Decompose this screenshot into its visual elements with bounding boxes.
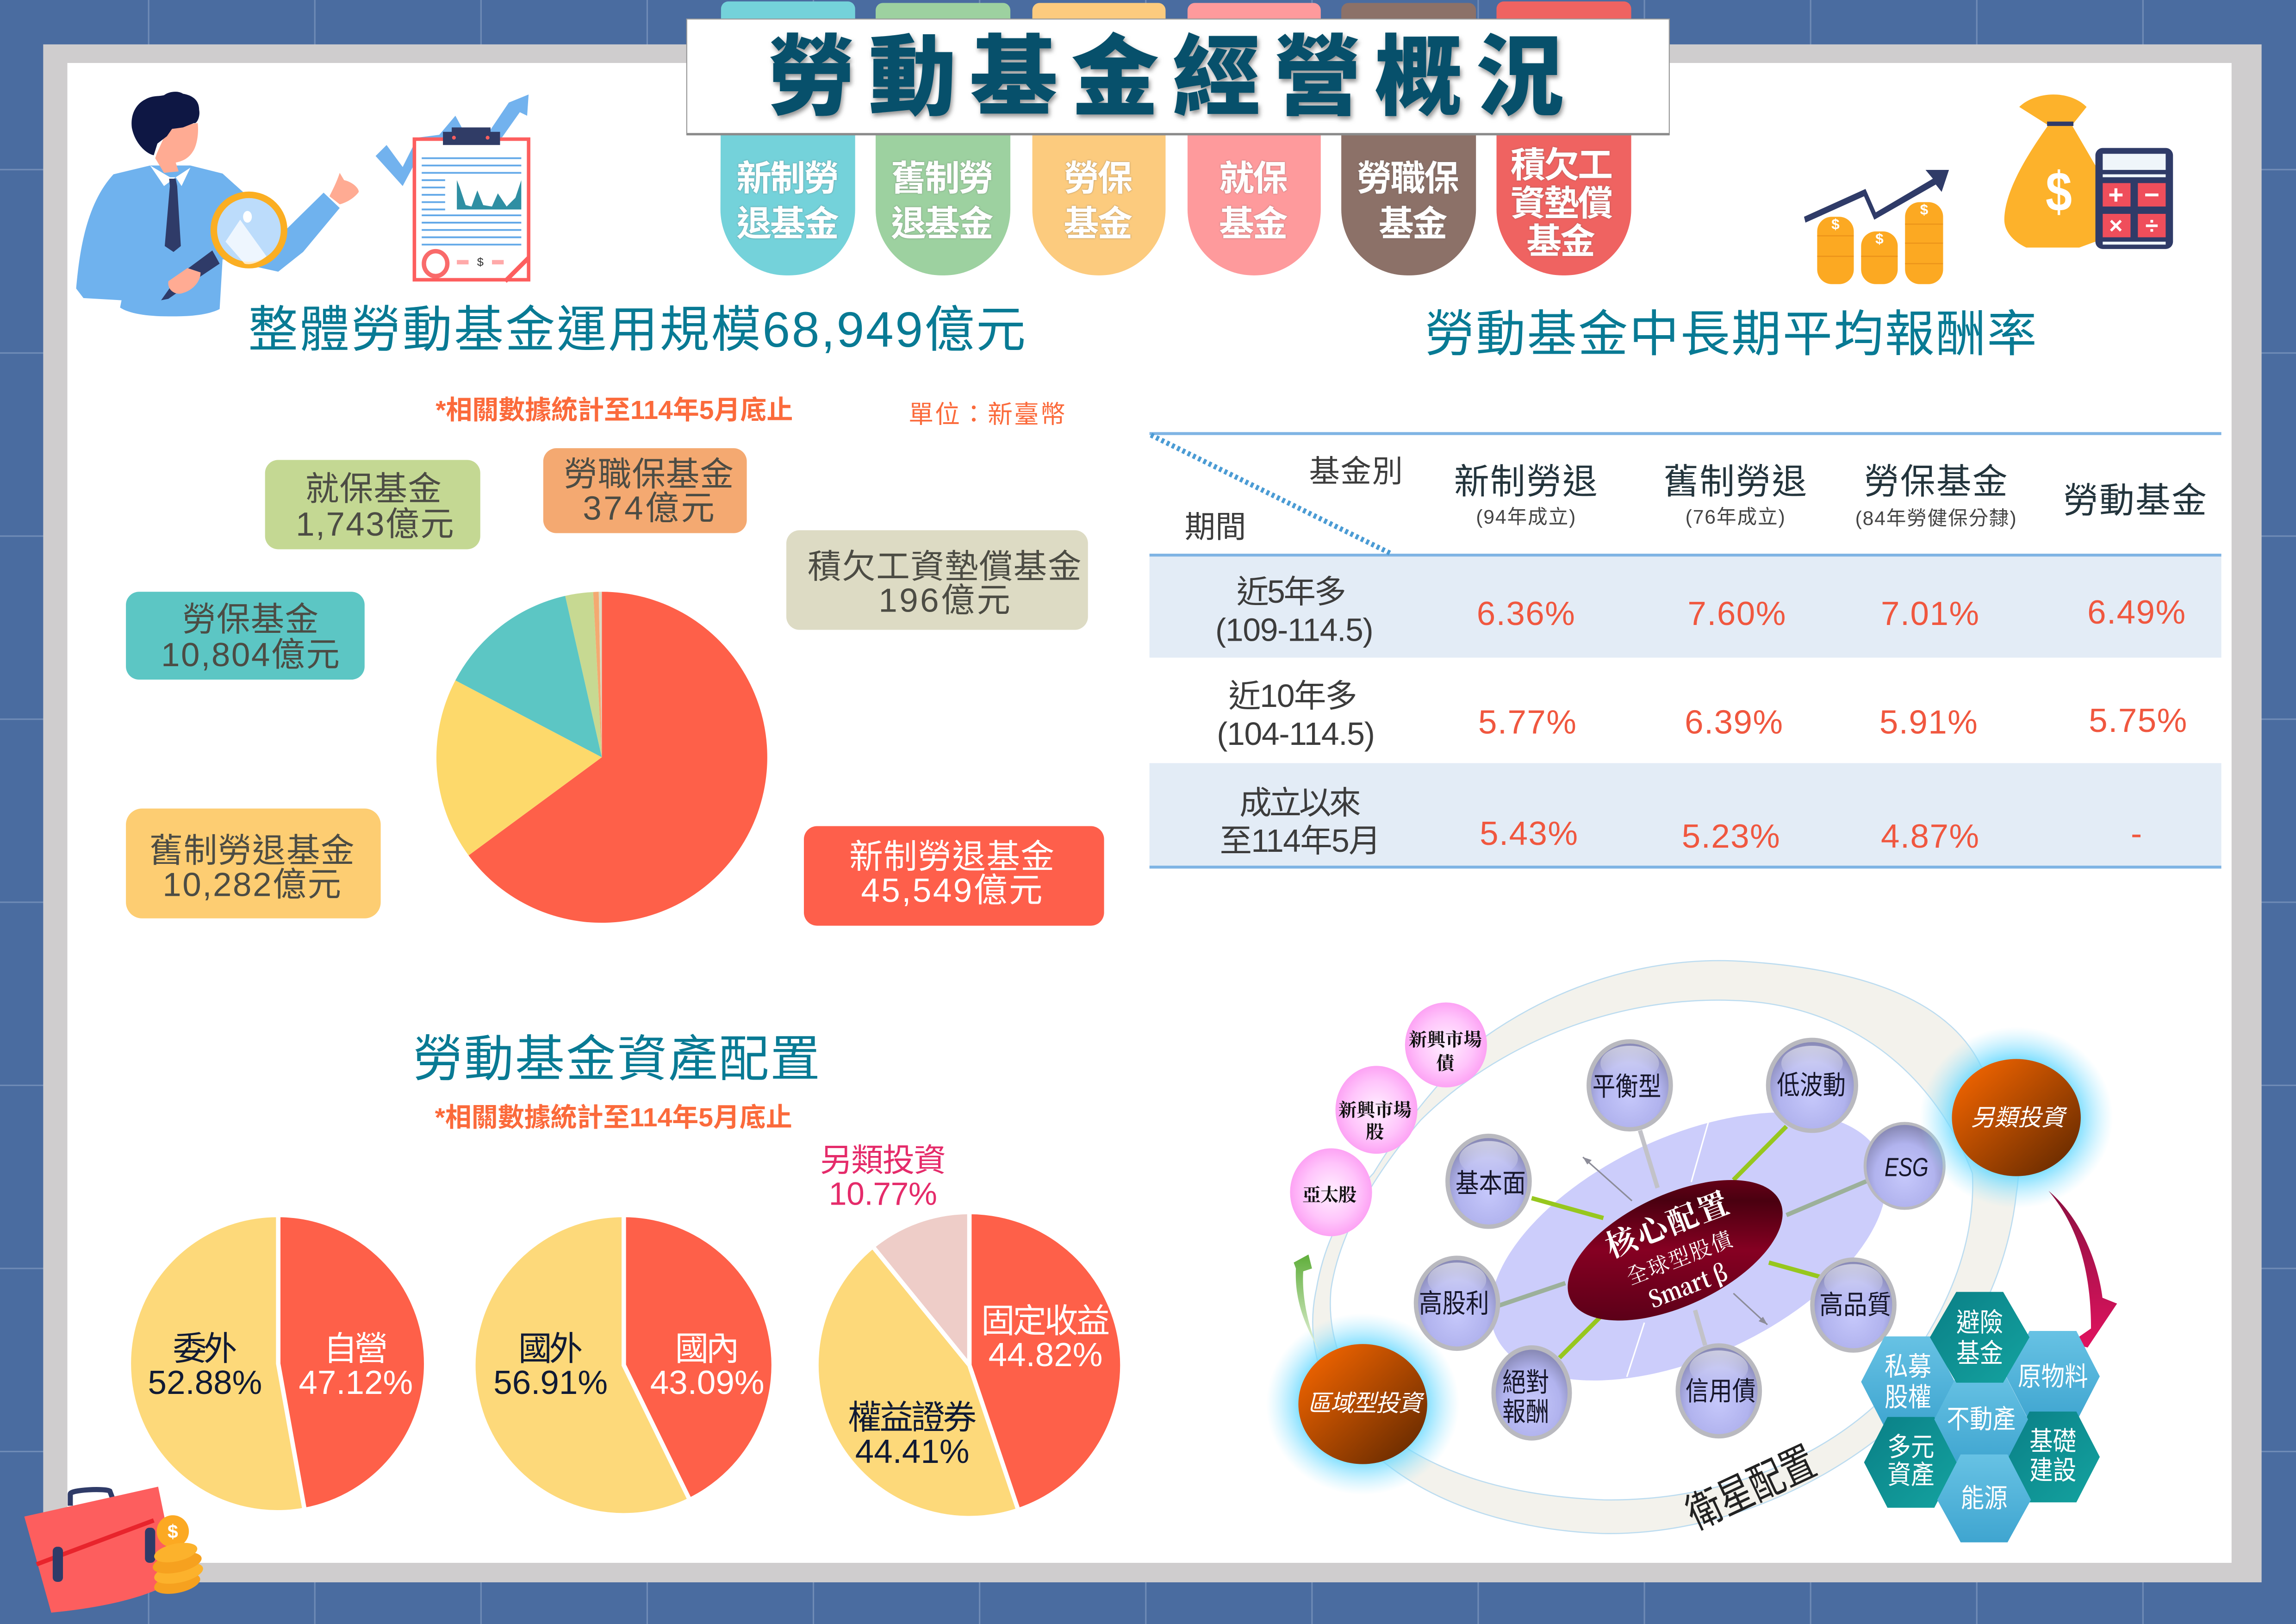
core ellipse backdrop: [1450, 1057, 1927, 1436]
sphere: 絕對報酬: 報酬: [1502, 1397, 1549, 1427]
tab: 勞保基金: 勞保: [1064, 159, 1132, 199]
hex: 多元資產: [1864, 1417, 1958, 1508]
label: 勞保基金: 勞保基金: [182, 601, 318, 638]
pie chart: domestic vs foreign: 56.91%: [493, 1364, 608, 1401]
label: 勞保基金: [126, 592, 365, 680]
sphere: 高股利: [1416, 1258, 1498, 1349]
tab: 就保基金: 基金: [1219, 205, 1288, 244]
hex: 私募股權: 股權: [1885, 1382, 1931, 1412]
label: 舊制勞退基金: [126, 808, 381, 918]
row: 近5年多: 7.60%: [1687, 595, 1786, 632]
row: 成立以來: [1220, 785, 2142, 859]
sphere: 高品質: 高品質: [1819, 1290, 1891, 1320]
illustration: coins and rising arrow: $: [1831, 216, 1840, 232]
tab: 勞保基金: 基金: [1064, 205, 1132, 244]
row: 近10年多: [1217, 678, 2187, 752]
row: 近10年多: 5.91%: [1879, 703, 1978, 741]
pie chart: self-managed vs outsourced: 委外: [173, 1330, 237, 1368]
row: 近5年多: 6.49%: [2087, 593, 2185, 631]
row: 近10年多: 5.75%: [2089, 702, 2187, 739]
illustration: money bag and calculator: +: [2108, 180, 2123, 210]
tab: 積欠工資墊償基金: 資墊償: [1511, 184, 1613, 223]
pie chart: asset classes: 44.82%: [989, 1336, 1102, 1374]
arrow: regional to Asia: [1294, 1255, 1319, 1352]
sphere: 平衡型: 平衡型: [1593, 1072, 1661, 1102]
illustration: briefcase and coins: [25, 1487, 205, 1612]
sphere: 另類投資: 另類投資: [1971, 1105, 2067, 1131]
row: 成立以來: 成立以來: [1239, 785, 1361, 821]
pie chart: asset classes: 44.41%: [855, 1433, 970, 1470]
sphere: ESG: ESG: [1885, 1153, 1929, 1182]
illustration: clipboard report with arrow: $: [477, 256, 484, 269]
bubble: 新興市場股: 股: [1366, 1118, 1384, 1144]
row: 近5年多: 7.01%: [1881, 595, 1979, 632]
tab: 勞保基金: [1033, 3, 1165, 275]
pie chart: asset classes: [816, 1212, 1122, 1518]
tab: 就保基金: [1188, 3, 1321, 275]
table header: (84年勞健保分隸): [1855, 507, 2016, 530]
label: 就保基金: 就保基金: [305, 470, 442, 508]
note: unit: 單位：新臺幣: [908, 400, 1065, 428]
tab: 積欠工資墊償基金: 積欠工: [1511, 146, 1613, 185]
pie chart: domestic vs foreign: 國外: [518, 1330, 583, 1368]
sphere: 基本面: [1448, 1136, 1530, 1227]
hex: 基礎建設: [2006, 1412, 2100, 1502]
hex: 多元資產: 資產: [1887, 1460, 1935, 1490]
label: 積欠工資墊償基金: 196億元: [878, 582, 1010, 619]
pie chart: asset classes: 權益證券: [848, 1399, 977, 1437]
pie chart: fund size: [436, 592, 767, 923]
bubble: 新興市場債: 新興市場: [1409, 1025, 1482, 1052]
label: 勞職保基金: [543, 448, 747, 533]
hex: 原物料: [2006, 1331, 2100, 1422]
callout: alternative investment share: [820, 1142, 946, 1212]
sphere: 信用債: 信用債: [1686, 1377, 1756, 1406]
sphere: 絕對報酬: [1493, 1348, 1570, 1438]
sphere: 基本面: 基本面: [1456, 1168, 1526, 1198]
callout: alternative investment share: 另類投資: [820, 1142, 946, 1178]
row: 成立以來: 4.87%: [1881, 818, 1979, 855]
illustration: briefcase and coins: $: [168, 1521, 178, 1542]
illustration: money bag and calculator: ÷: [2145, 212, 2158, 239]
heading: total fund size: 整體勞動基金運用規模68,949億元: [248, 302, 1026, 357]
heading: asset allocation: 勞動基金資產配置: [413, 1031, 820, 1087]
illustration: coins and rising arrow: [1804, 170, 1949, 284]
row: 成立以來: 5.43%: [1480, 815, 1578, 852]
illustration: money bag and calculator: $: [2046, 161, 2072, 223]
label: 積欠工資墊償基金: 積欠工資墊償基金: [808, 548, 1082, 586]
bubble: 亞太股: 亞太股: [1302, 1181, 1356, 1207]
tab: 勞職保基金: 勞職保: [1356, 159, 1459, 199]
tab: 新制勞退基金: 退基金: [736, 205, 839, 244]
tab: 新制勞退基金: 新制勞: [736, 159, 839, 199]
sphere: 高股利: 高股利: [1419, 1289, 1489, 1318]
title: 勞動基金經營概況: [767, 29, 1564, 127]
label: 舊制勞退基金: 10,282億元: [162, 866, 341, 904]
bubble: 新興市場股: [1335, 1066, 1418, 1154]
tab: 舊制勞退基金: [876, 3, 1010, 275]
illustration: clipboard report with arrow: [376, 94, 529, 281]
illustration: coins and rising arrow: $: [1875, 231, 1884, 247]
sphere: ESG: [1865, 1124, 1944, 1208]
hex: 私募股權: 私募: [1885, 1352, 1931, 1381]
bubble: 新興市場債: [1405, 1002, 1487, 1087]
pie chart: domestic vs foreign: [473, 1215, 774, 1515]
callout: alternative investment share: 10.77%: [829, 1176, 937, 1212]
table header: (76年成立): [1686, 506, 1785, 528]
sphere: 低波動: 低波動: [1777, 1070, 1846, 1100]
hex: 不動產: [1935, 1374, 2028, 1465]
illustration: analyst with magnifier: [76, 92, 359, 316]
fund tabs: [721, 1, 1631, 275]
pie chart: domestic vs foreign: 國內: [675, 1330, 740, 1368]
hex: 不動產: 不動產: [1947, 1405, 2016, 1434]
illustration: money bag and calculator: ×: [2109, 212, 2123, 239]
table header: 勞保基金: [1864, 462, 2008, 501]
sphere: 高品質: [1812, 1260, 1894, 1350]
table header: 基金別: [1309, 455, 1403, 489]
table header: [1185, 455, 2207, 544]
hex: 私募股權: [1861, 1337, 1955, 1427]
core: 核心配置: 核心配置: [1599, 1180, 1735, 1267]
pie chart: self-managed vs outsourced: 47.12%: [299, 1364, 413, 1401]
illustration: coins and rising arrow: $: [1920, 201, 1929, 218]
tab: 舊制勞退基金: 退基金: [891, 205, 994, 244]
pie chart: self-managed vs outsourced: 自營: [324, 1330, 388, 1368]
sphere: 另類投資: [1920, 1027, 2113, 1208]
pie chart: self-managed vs outsourced: 52.88%: [148, 1364, 262, 1401]
label: 勞職保基金: 374億元: [583, 489, 715, 527]
label: 衛星配置: 衛星配置: [1680, 1438, 1823, 1538]
row: 近10年多: 6.39%: [1685, 703, 1783, 741]
note: data date: *相關數據統計至114年5月底止: [435, 1103, 792, 1132]
hex: 能源: 能源: [1960, 1484, 2008, 1513]
tab: 勞職保基金: [1341, 3, 1476, 275]
hex: 原物料: 原物料: [2018, 1362, 2088, 1392]
row: 近10年多: 近10年多: [1229, 678, 1357, 714]
bubble: 亞太股: [1290, 1149, 1372, 1236]
diagram: core-satellite allocation: [1266, 961, 2117, 1543]
tab: 舊制勞退基金: 舊制勞: [891, 159, 994, 199]
row: 近5年多: 近5年多: [1237, 574, 1346, 610]
core: 核心配置: [1547, 1151, 1804, 1349]
core: 核心配置: 全球型股債: [1621, 1222, 1737, 1291]
sphere: 低波動: [1768, 1040, 1856, 1131]
hex: 能源: [1937, 1455, 2031, 1543]
table header: (94年成立): [1476, 506, 1575, 528]
pie chart: self-managed vs outsourced: [129, 1215, 426, 1512]
hexagon cluster: alternative assets: [1861, 1292, 2100, 1543]
row: 近10年多: 5.77%: [1478, 703, 1576, 741]
hex: 避險基金: 避險: [1956, 1308, 2003, 1337]
hex: 避險基金: [1930, 1292, 2029, 1383]
hex: 基礎建設: 建設: [2029, 1456, 2076, 1486]
bubble: 新興市場股: 新興市場: [1338, 1096, 1412, 1122]
sphere: 平衡型: [1589, 1042, 1671, 1129]
row: 近5年多: 6.36%: [1477, 595, 1575, 632]
core: 核心配置: Smart β: [1643, 1254, 1732, 1315]
tab: 積欠工資墊償基金: 基金: [1526, 222, 1595, 262]
hex: 避險基金: 基金: [1956, 1338, 2003, 1368]
illustration: money bag and calculator: −: [2144, 180, 2159, 210]
table header: 舊制勞退: [1663, 462, 1807, 501]
sphere: 絕對報酬: 絕對: [1502, 1368, 1549, 1398]
label: 就保基金: 1,743億元: [296, 506, 454, 543]
label: 勞職保基金: 勞職保基金: [564, 456, 734, 493]
ring: satellite allocation: [1313, 961, 2019, 1534]
arrow: alternative to hedge hexes: [2048, 1191, 2117, 1348]
sphere: 區域型投資: [1266, 1313, 1459, 1495]
sphere: 信用債: [1678, 1345, 1760, 1437]
row: 近5年多: [1215, 574, 2185, 648]
tab: 新制勞退基金: [721, 1, 855, 275]
table: average returns: [1150, 434, 2221, 867]
row: 成立以來: -: [2131, 815, 2142, 852]
label: 勞保基金: 10,804億元: [161, 636, 340, 674]
tab: 勞職保基金: 基金: [1379, 205, 1448, 244]
pie chart: asset classes: 固定收益: [981, 1302, 1110, 1340]
row: 近5年多: (109-114.5): [1215, 612, 1374, 648]
row: 近10年多: (104-114.5): [1217, 716, 1375, 752]
label: 就保基金: [265, 460, 480, 549]
hex: 基礎建設: 基礎: [2029, 1426, 2076, 1456]
sphere: 區域型投資: 區域型投資: [1307, 1390, 1425, 1417]
label: 舊制勞退基金: 舊制勞退基金: [149, 832, 355, 870]
table header: 新制勞退: [1454, 462, 1598, 501]
label: 積欠工資墊償基金: [786, 530, 1088, 630]
bubble: 新興市場債: 債: [1436, 1049, 1457, 1075]
spokes: [1497, 1120, 1866, 1377]
tab: 就保基金: 就保: [1219, 159, 1288, 199]
label: 新制勞退基金: 45,549億元: [861, 872, 1043, 909]
pie chart: domestic vs foreign: 43.09%: [650, 1364, 765, 1401]
label: 新制勞退基金: [804, 826, 1104, 926]
illustration: money bag and calculator: [2004, 94, 2173, 249]
hex: 多元資產: 多元: [1887, 1432, 1935, 1462]
heading: long-term average return: 勞動基金中長期平均報酬率: [1425, 306, 2037, 362]
row: 成立以來: 至114年5月: [1220, 823, 1381, 859]
label: 新制勞退基金: 新制勞退基金: [849, 838, 1054, 875]
tab: 積欠工資墊償基金: [1497, 1, 1631, 275]
note: data date: *相關數據統計至114年5月底止: [436, 395, 793, 425]
title: [687, 19, 1669, 135]
table header: 期間: [1185, 510, 1246, 544]
row: 成立以來: 5.23%: [1682, 818, 1780, 855]
table header: 勞動基金: [2063, 481, 2207, 521]
